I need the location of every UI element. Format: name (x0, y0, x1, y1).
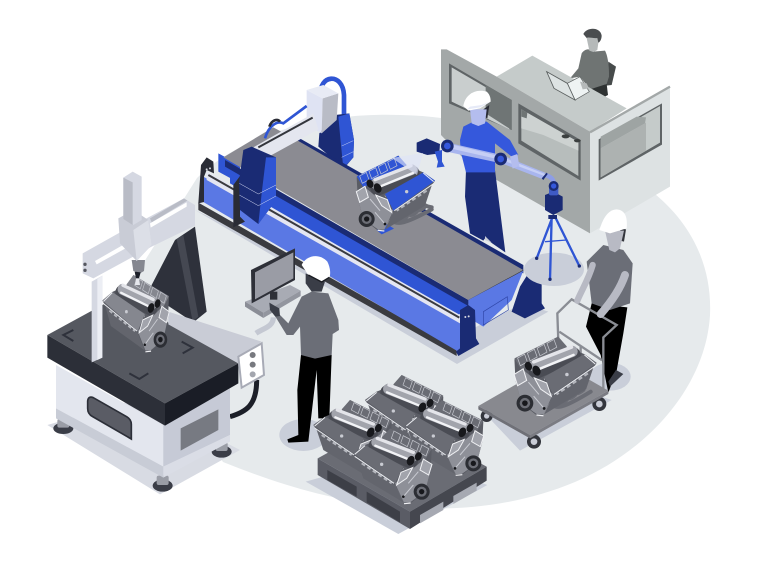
booth desk top (497, 56, 627, 132)
tripod shadow (524, 253, 584, 286)
bench back edge (297, 137, 523, 273)
CMM gantry beam (83, 198, 195, 278)
booth operator (570, 29, 616, 97)
pallet shadow (306, 453, 487, 534)
cart handle (557, 299, 617, 388)
pallet of engines (306, 375, 487, 534)
monitor stand (245, 285, 301, 318)
cart wheels (481, 397, 606, 449)
monitor (251, 248, 295, 303)
front worker legs (287, 355, 332, 443)
booth right window (518, 103, 581, 181)
cart worker shadow (589, 363, 631, 391)
floor area blob (120, 115, 710, 509)
cart worker and cart (478, 209, 633, 451)
left end plate (218, 153, 240, 183)
scan beam (392, 153, 423, 175)
left rail bracket (198, 157, 245, 227)
front worker shadow (279, 419, 327, 451)
front right post (456, 305, 479, 356)
rear gantry post (307, 79, 354, 168)
CMM feet (53, 419, 232, 492)
handheld scanner (417, 138, 445, 168)
blue worker torso (460, 122, 518, 172)
CMM table top (47, 295, 238, 426)
engine: back left (365, 375, 444, 450)
CMM right panel (181, 409, 218, 451)
booth right window glass (599, 103, 662, 181)
blue worker legs (465, 170, 505, 252)
CMM side rail (168, 312, 262, 363)
bench end face (468, 271, 523, 327)
engine on CMM (102, 275, 169, 352)
scan head on tripod (545, 186, 563, 215)
cart worker torso (587, 245, 633, 310)
bench upper blue band (230, 167, 468, 315)
control booth (441, 29, 670, 233)
front gantry carriage (239, 106, 318, 224)
front worker at monitor (245, 248, 339, 451)
booth right wall (590, 86, 670, 233)
front worker head (302, 256, 330, 292)
CMM left panel (88, 397, 131, 439)
CMM base (56, 365, 230, 478)
front worker hand (269, 303, 280, 317)
tripod (535, 215, 581, 281)
CMM floor shadow (47, 398, 240, 494)
blue worker head (463, 91, 491, 126)
front worker torso and arm (275, 292, 339, 359)
cart worker head (599, 209, 627, 252)
bench light blue side (203, 177, 460, 353)
CMM tower (152, 227, 207, 322)
bench navy edge (225, 160, 468, 306)
CMM carriage and column (118, 172, 152, 261)
rear right post (512, 265, 545, 318)
cart platform (478, 361, 608, 438)
pallet (318, 417, 487, 529)
cart engine (514, 337, 597, 416)
measuring arm (441, 140, 559, 191)
monitor cable (256, 317, 273, 333)
booth left window (449, 63, 512, 130)
booth left wall (441, 49, 590, 233)
cart shadow (480, 387, 612, 451)
measuring bench machine (195, 79, 548, 364)
cart worker legs (586, 303, 627, 393)
CMM gantry leg (92, 276, 102, 362)
CMM control box (238, 343, 264, 388)
bench ground shadow (195, 210, 548, 364)
cart worker arms (577, 265, 625, 314)
scanner worker and measuring arm (392, 91, 584, 286)
laptop (547, 72, 589, 100)
bench gray surface (223, 127, 523, 300)
CMM probe (132, 260, 145, 285)
engine on bench with blue covers (356, 156, 435, 234)
engine: front right (353, 428, 432, 504)
engine: back right (405, 400, 484, 475)
bench rail (207, 172, 460, 323)
engine: front left (313, 400, 392, 475)
coordinate measuring machine (47, 172, 264, 494)
CMM cable (230, 380, 257, 417)
bench base strip (198, 203, 457, 356)
